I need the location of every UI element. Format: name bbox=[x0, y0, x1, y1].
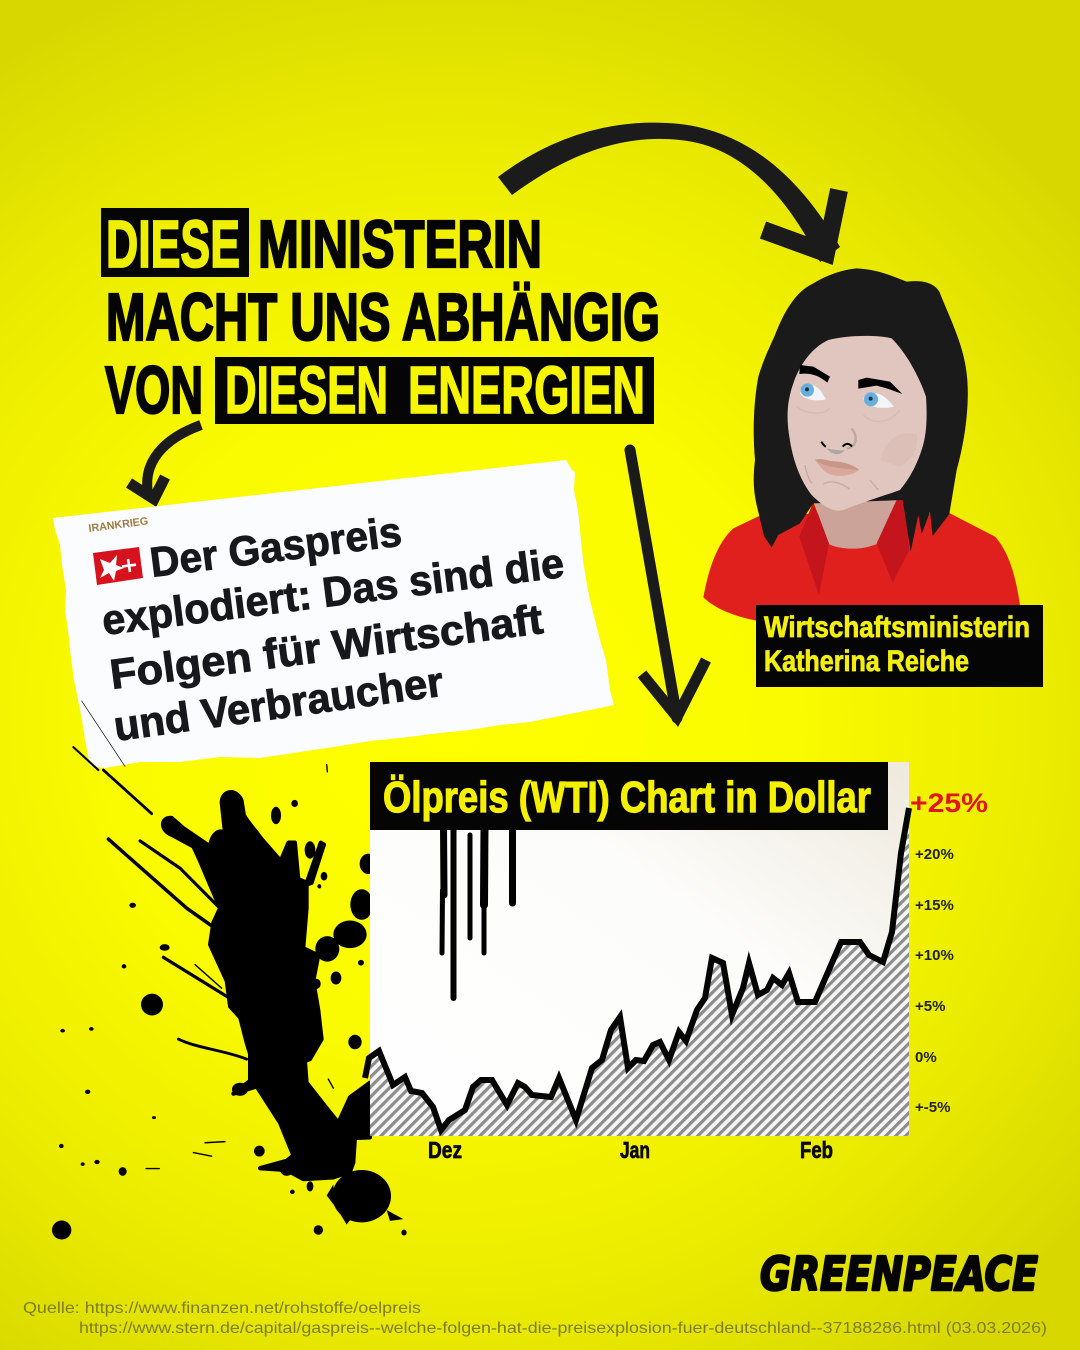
highlight box: DIESEN ENERGIEN bbox=[215, 357, 654, 424]
highlight word: DIESE: DIESE bbox=[106, 207, 240, 282]
ink splatter bbox=[52, 701, 407, 1239]
chart title bbox=[370, 762, 888, 830]
chart: oil price WTI bbox=[365, 762, 988, 1163]
eye right bbox=[863, 393, 894, 408]
chart title: Ölpreis (WTI) Chart in Dollar bbox=[383, 773, 871, 822]
collar right bbox=[877, 488, 909, 583]
shirt bbox=[703, 513, 1021, 621]
eyebrow left bbox=[799, 365, 830, 383]
face bbox=[788, 336, 927, 511]
y axis labels bbox=[915, 846, 954, 1116]
x axis labels: Dez bbox=[428, 1137, 462, 1163]
source note bbox=[23, 1300, 1047, 1337]
headline line 1: Der Gaspreis bbox=[147, 508, 404, 586]
source note: Quelle: https://www.finanzen.net/rohstoffe/oelpreis bbox=[23, 1300, 421, 1317]
headline line 4: und Verbraucher bbox=[111, 658, 446, 750]
heading word: VON: VON bbox=[105, 353, 203, 428]
heading word: MINISTERIN: MINISTERIN bbox=[258, 207, 542, 282]
mouth bbox=[815, 459, 859, 476]
title bbox=[101, 207, 660, 428]
ink drips bbox=[442, 825, 512, 998]
price line bbox=[365, 808, 909, 1130]
x axis labels: Jan bbox=[620, 1137, 650, 1163]
highlight word: DIESEN: DIESEN bbox=[225, 353, 388, 428]
neck bbox=[813, 490, 902, 549]
y axis labels: 0% bbox=[915, 1049, 937, 1066]
y axis labels: +15% bbox=[915, 897, 954, 914]
peak value: +25% bbox=[910, 788, 988, 818]
label: Wirtschaftsministerin Katherina Reiche bbox=[756, 605, 1043, 687]
y axis labels: +-5% bbox=[915, 1099, 950, 1116]
arrow: headline to chart bbox=[630, 450, 706, 718]
hair bbox=[754, 268, 968, 552]
nose bbox=[827, 448, 845, 454]
chart background bbox=[370, 762, 909, 1136]
heading line 2: MACHT UNS ABHÄNGIG bbox=[106, 280, 660, 355]
y axis labels: +10% bbox=[915, 947, 954, 964]
highlight box: DIESE bbox=[101, 208, 249, 277]
x axis labels bbox=[428, 1137, 833, 1163]
headline line 2: explodiert: Das sind die bbox=[99, 539, 566, 644]
y axis labels: +5% bbox=[915, 998, 945, 1015]
x axis labels: Feb bbox=[800, 1137, 833, 1163]
label: Wirtschaftsministerin Katherina Reiche: Wirtschaftsministerin bbox=[764, 611, 1030, 644]
arrow: headline to news clipping bbox=[129, 425, 201, 499]
kicker: IRANKRIEG: IRANKRIEG bbox=[88, 515, 149, 535]
panel: torn news clipping bbox=[53, 460, 614, 768]
source note: https://www.stern.de/capital/gaspreis--welche-folgen-hat-die-preisexplosion-fuer-deutschland--37188286.html (03.03.2026) bbox=[79, 1320, 1047, 1337]
eye left bbox=[800, 385, 826, 400]
highlight word: ENERGIEN: ENERGIEN bbox=[408, 353, 645, 428]
eyebrow right bbox=[858, 378, 902, 394]
portrait: Katherina Reiche illustration bbox=[703, 268, 1021, 621]
label: Wirtschaftsministerin Katherina Reiche: Katherina Reiche bbox=[764, 645, 969, 678]
headline line 3: Folgen für Wirtschaft bbox=[107, 595, 546, 698]
arrow: headline to minister bbox=[498, 123, 840, 262]
collar left bbox=[799, 502, 829, 595]
icon: stern plus logo bbox=[93, 547, 143, 585]
y axis labels: +20% bbox=[915, 846, 954, 863]
area under the curve bbox=[369, 808, 909, 1136]
cheek shade bbox=[880, 433, 917, 467]
